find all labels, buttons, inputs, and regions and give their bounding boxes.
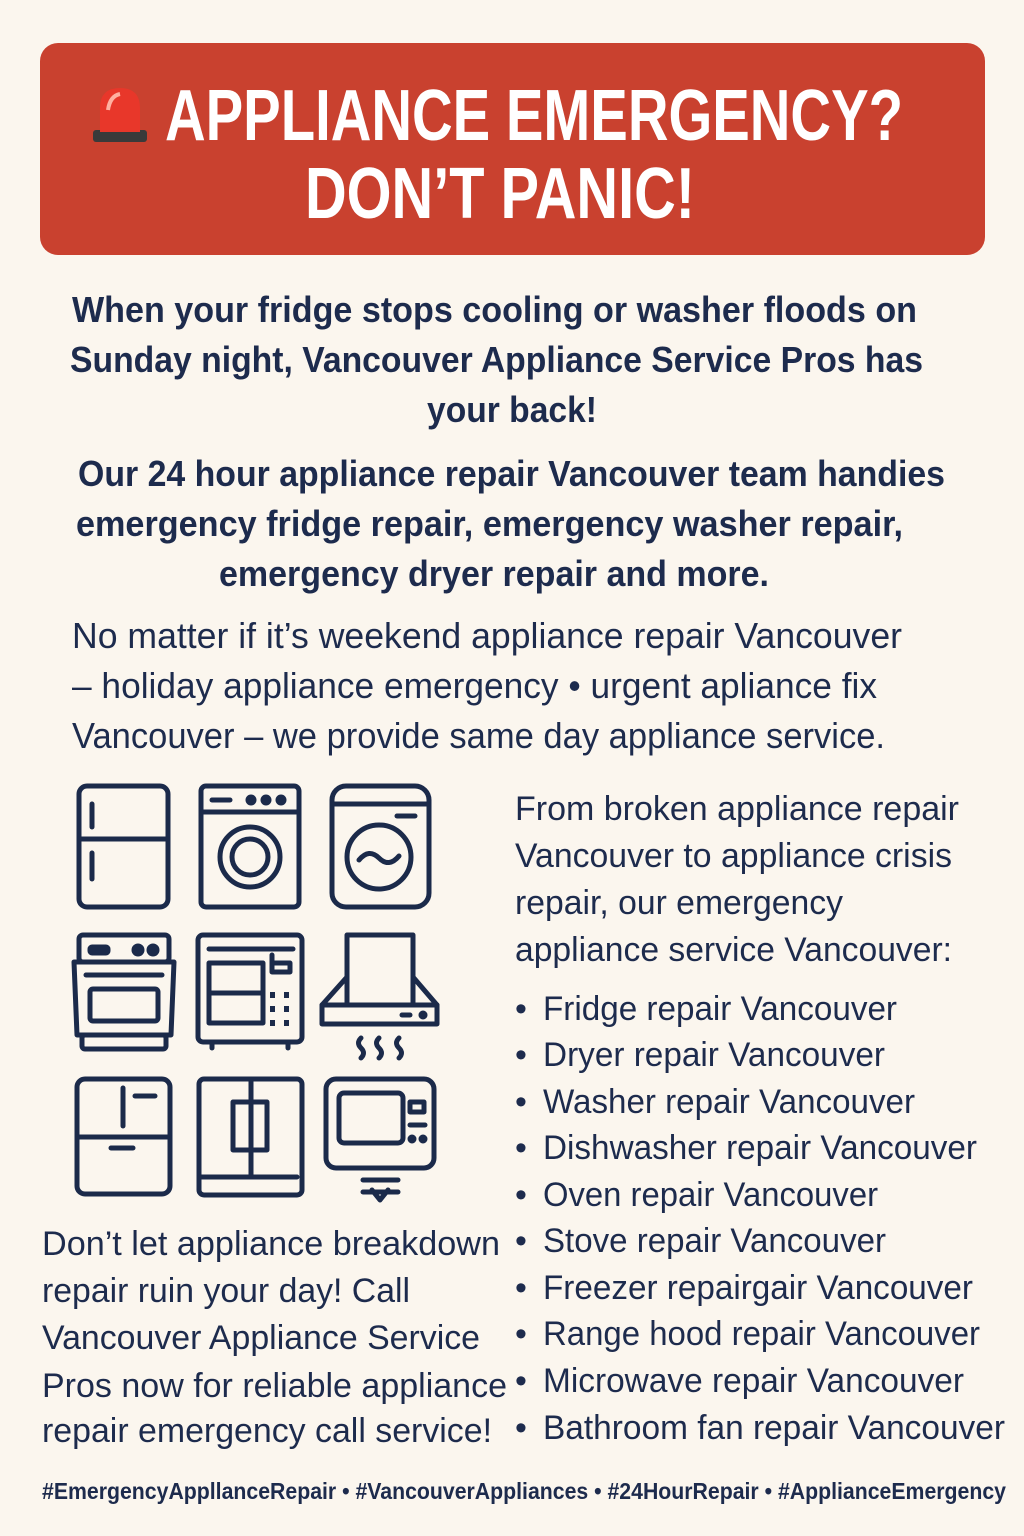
- availability paragraph: No matter if it’s weekend appliance repair Vancouver: [72, 615, 902, 656]
- availability paragraph: [72, 615, 902, 756]
- services paragraph: [76, 453, 945, 594]
- availability paragraph: Vancouver – we provide same day appliance service.: [72, 715, 885, 756]
- intro paragraph: When your fridge stops cooling or washer floods on: [72, 289, 917, 330]
- right column intro: From broken appliance repair: [515, 790, 959, 828]
- icon: fridge freezer: [77, 1079, 170, 1194]
- intro paragraph: your back!: [427, 389, 597, 430]
- services paragraph: Our 24 hour appliance repair Vancouver team handies: [78, 453, 945, 494]
- service list: Washer repair Vancouver: [543, 1083, 915, 1121]
- right column intro: Vancouver to appliance crisis: [515, 837, 952, 875]
- service list: •: [515, 1176, 527, 1214]
- call to action: [42, 1225, 507, 1450]
- icon: fridge: [79, 786, 168, 907]
- icon: siren: [93, 88, 147, 142]
- service list: Oven repair Vancouver: [543, 1176, 878, 1214]
- title text: [165, 76, 903, 234]
- intro paragraph: [70, 289, 923, 430]
- service list: •: [515, 1129, 527, 1167]
- title banner: [40, 43, 985, 255]
- icon: washer: [201, 786, 299, 907]
- call to action: Don’t let appliance breakdown: [42, 1225, 500, 1263]
- service list: •: [515, 1362, 527, 1400]
- right column intro: appliance service Vancouver:: [515, 931, 952, 969]
- icon: range hood: [322, 935, 437, 1058]
- service list: •: [515, 1036, 527, 1074]
- service list: Microwave repair Vancouver: [543, 1362, 964, 1400]
- intro paragraph: Sunday night, Vancouver Appliance Service Pros has: [70, 339, 923, 380]
- service list: Fridge repair Vancouver: [543, 990, 897, 1028]
- service list: •: [515, 1315, 527, 1353]
- service list: •: [515, 990, 527, 1028]
- availability paragraph: – holiday appliance emergency • urgent apliance fix: [72, 665, 877, 706]
- right column intro: repair, our emergency: [515, 884, 843, 922]
- call to action: repair ruin your day! Call: [42, 1272, 410, 1310]
- title text: DON’T PANIC!: [305, 154, 695, 234]
- service list: Range hood repair Vancouver: [543, 1315, 980, 1353]
- icon: microwave: [326, 1079, 434, 1200]
- services paragraph: emergency dryer repair and more.: [219, 553, 769, 594]
- service list: [515, 990, 1005, 1447]
- service list: Stove repair Vancouver: [543, 1222, 886, 1260]
- icon: french door fridge: [199, 1079, 302, 1195]
- icon: combo oven: [198, 935, 302, 1048]
- service list: Dryer repair Vancouver: [543, 1036, 885, 1074]
- service list: Bathroom fan repair Vancouver: [543, 1409, 1005, 1447]
- service list: Dishwasher repair Vancouver: [543, 1129, 977, 1167]
- icon: dryer: [332, 786, 429, 907]
- call to action: Pros now for reliable appliance: [42, 1367, 507, 1405]
- right column intro: [515, 790, 959, 969]
- services paragraph: emergency fridge repair, emergency washer repair,: [76, 503, 903, 544]
- service list: Freezer repairgair Vancouver: [543, 1269, 973, 1307]
- icon grid: appliances: [74, 786, 437, 1200]
- service list: •: [515, 1269, 527, 1307]
- call to action: repair emergency call service!: [42, 1412, 492, 1450]
- service list: •: [515, 1409, 527, 1447]
- service list: •: [515, 1083, 527, 1121]
- service list: •: [515, 1222, 527, 1260]
- call to action: Vancouver Appliance Service: [42, 1319, 480, 1357]
- icon: oven: [74, 935, 174, 1049]
